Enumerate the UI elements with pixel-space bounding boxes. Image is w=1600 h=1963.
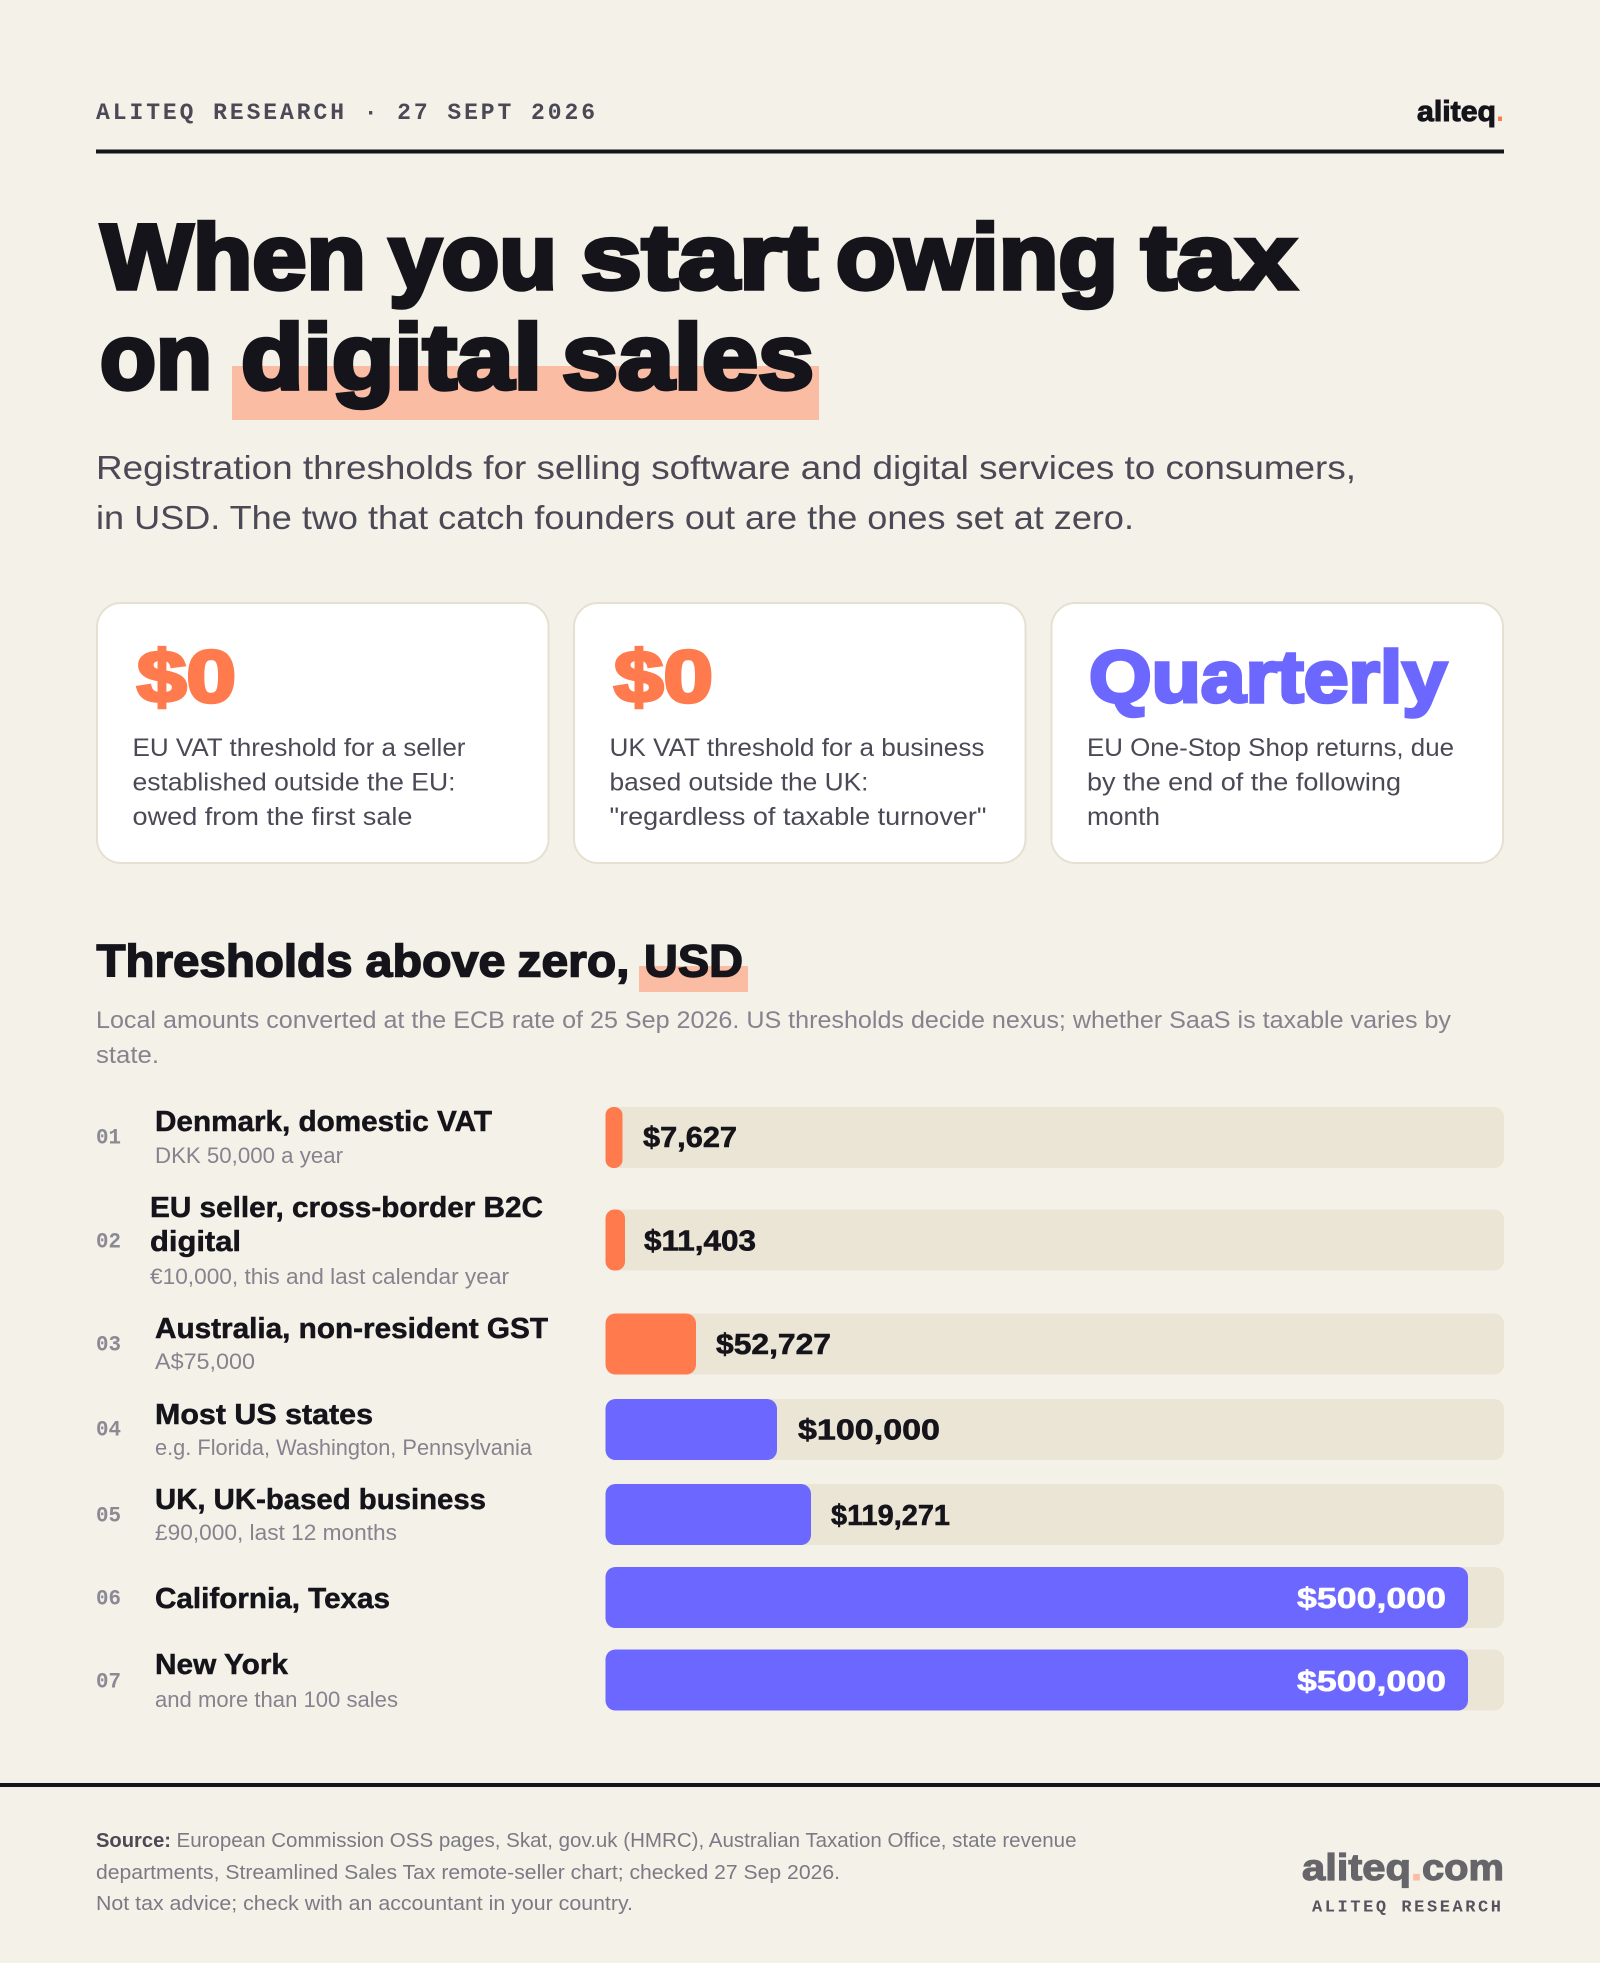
title: owing [836, 206, 1118, 308]
row 06 California, Texas: $500,000 [1297, 1583, 1446, 1615]
description: One-Stop Shop: EU One-Stop Shop returns, due [1087, 734, 1454, 762]
title: on [100, 306, 212, 408]
section heading: zero, [518, 936, 630, 986]
title: you [389, 206, 557, 308]
row 03 Australia: Australia, non-resident GST [155, 1313, 549, 1345]
row 07 New York: New York [155, 1649, 288, 1681]
section heading: Thresholds [96, 936, 352, 986]
header logo: . [1496, 95, 1504, 128]
subtitle: Registration thresholds for selling software and digital services to consumers, [96, 449, 1356, 486]
row 06 California, Texas: 06 [96, 1586, 121, 1612]
row 03 Australia: 03 [96, 1332, 121, 1358]
footer source text: European Commission OSS pages, Skat, gov.uk (HMRC), Australian Taxation Office, state revenue [176, 1830, 1076, 1852]
row 01 Denmark: DKK 50,000 a year [155, 1143, 343, 1168]
row 01 Denmark: Denmark, domestic VAT [155, 1106, 493, 1138]
section heading: USD [644, 936, 743, 986]
row 04 Most US states: e.g. Florida, Washington, Pennsylvania [155, 1435, 533, 1460]
footer brand: aliteq [1302, 1847, 1411, 1888]
section note: Local amounts converted at the ECB rate of 25 Sep 2026. US thresholds decide nexus; whether SaaS is taxable varies by [96, 1007, 1451, 1034]
row 01 Denmark: $7,627 [643, 1122, 737, 1154]
row 03 Australia [96, 1313, 1504, 1374]
header logo: aliteq [1417, 96, 1496, 128]
row 05 UK: £90,000, last 12 months [155, 1520, 397, 1545]
footer brand: com [1422, 1847, 1504, 1888]
row 07 New York: $500,000 [1297, 1666, 1446, 1698]
section heading: above [366, 936, 506, 986]
row 04 Most US states: $100,000 [798, 1414, 940, 1446]
footer brand: . [1411, 1847, 1422, 1889]
subtitle: in USD. The two that catch founders out are the ones set at zero. [96, 499, 1134, 536]
stat: EU $0: $0 [137, 637, 236, 718]
row 02 EU seller: $11,403 [644, 1226, 756, 1258]
row 05 UK: $119,271 [831, 1500, 950, 1532]
panel: UK VAT stat card [574, 603, 1026, 863]
bar chart [96, 1106, 1504, 1712]
row 07 New York: and more than 100 sales [155, 1687, 398, 1712]
description: UK VAT: based outside the UK: [610, 768, 868, 796]
footer source text: departments, Streamlined Sales Tax remote-seller chart; checked 27 Sep 2026. [96, 1862, 840, 1884]
title: sales [562, 306, 814, 408]
row 02 EU seller: digital [150, 1226, 241, 1258]
description: UK VAT: "regardless of taxable turnover" [610, 803, 986, 831]
title: digital [241, 306, 542, 408]
heading highlight [639, 966, 748, 992]
footer source text: Source: [96, 1830, 171, 1852]
description: UK VAT [610, 734, 986, 831]
footer source text [96, 1830, 1076, 1915]
footer source text: Not tax advice; check with an accountant in your country. [96, 1893, 633, 1915]
row 01 Denmark: 01 [96, 1126, 121, 1150]
section heading [96, 936, 748, 992]
description: EU VAT [132, 734, 466, 831]
stat: UK $0: $0 [614, 637, 713, 718]
row 03 Australia: A$75,000 [155, 1349, 255, 1374]
row 02 EU seller [96, 1192, 1504, 1289]
panel: EU VAT stat card [97, 603, 548, 863]
row 04 Most US states: Most US states [155, 1399, 373, 1431]
footer brand: ALITEQ RESEARCH [1312, 1898, 1501, 1918]
title: When [101, 206, 366, 308]
row 05 UK: 05 [96, 1504, 121, 1528]
row 01 Denmark [96, 1106, 1504, 1168]
description: UK VAT: UK VAT threshold for a business [610, 734, 984, 762]
row 05 UK: UK, UK-based business [155, 1484, 486, 1516]
description: EU VAT: owed from the first sale [132, 803, 412, 831]
row 02 EU seller: 02 [96, 1230, 121, 1254]
header dateline: ALITEQ RESEARCH · 27 SEPT 2026 [96, 100, 595, 126]
description: EU VAT: established outside the EU: [132, 768, 456, 796]
title highlight [232, 366, 819, 420]
row 07 New York [96, 1649, 1504, 1712]
row 04 Most US states [96, 1399, 1504, 1460]
section note [96, 1007, 1451, 1069]
description: One-Stop Shop: month [1087, 803, 1160, 831]
header bar [96, 95, 1504, 154]
row 03 Australia: $52,727 [716, 1329, 831, 1361]
panel: EU One-Stop Shop stat card [1052, 603, 1503, 863]
row 02 EU seller: EU seller, cross-border B2C [150, 1192, 543, 1224]
section note: state. [96, 1042, 159, 1069]
footer brand [1302, 1847, 1504, 1918]
title: tax [1141, 206, 1296, 308]
title [100, 206, 1296, 420]
row 07 New York: 07 [96, 1670, 121, 1694]
description: One-Stop Shop: by the end of the following [1087, 768, 1401, 796]
row 02 EU seller: €10,000, this and last calendar year [150, 1264, 509, 1289]
row 06 California, Texas [96, 1567, 1504, 1628]
subtitle [96, 449, 1356, 536]
stat: Quarterly: Quarterly [1089, 637, 1447, 718]
description: One-Stop Shop [1087, 734, 1454, 831]
title: start [581, 206, 818, 308]
row 06 California, Texas: California, Texas [155, 1583, 390, 1615]
row 04 Most US states: 04 [96, 1418, 121, 1442]
description: EU VAT: EU VAT threshold for a seller [132, 734, 466, 762]
row 05 UK [96, 1484, 1504, 1545]
